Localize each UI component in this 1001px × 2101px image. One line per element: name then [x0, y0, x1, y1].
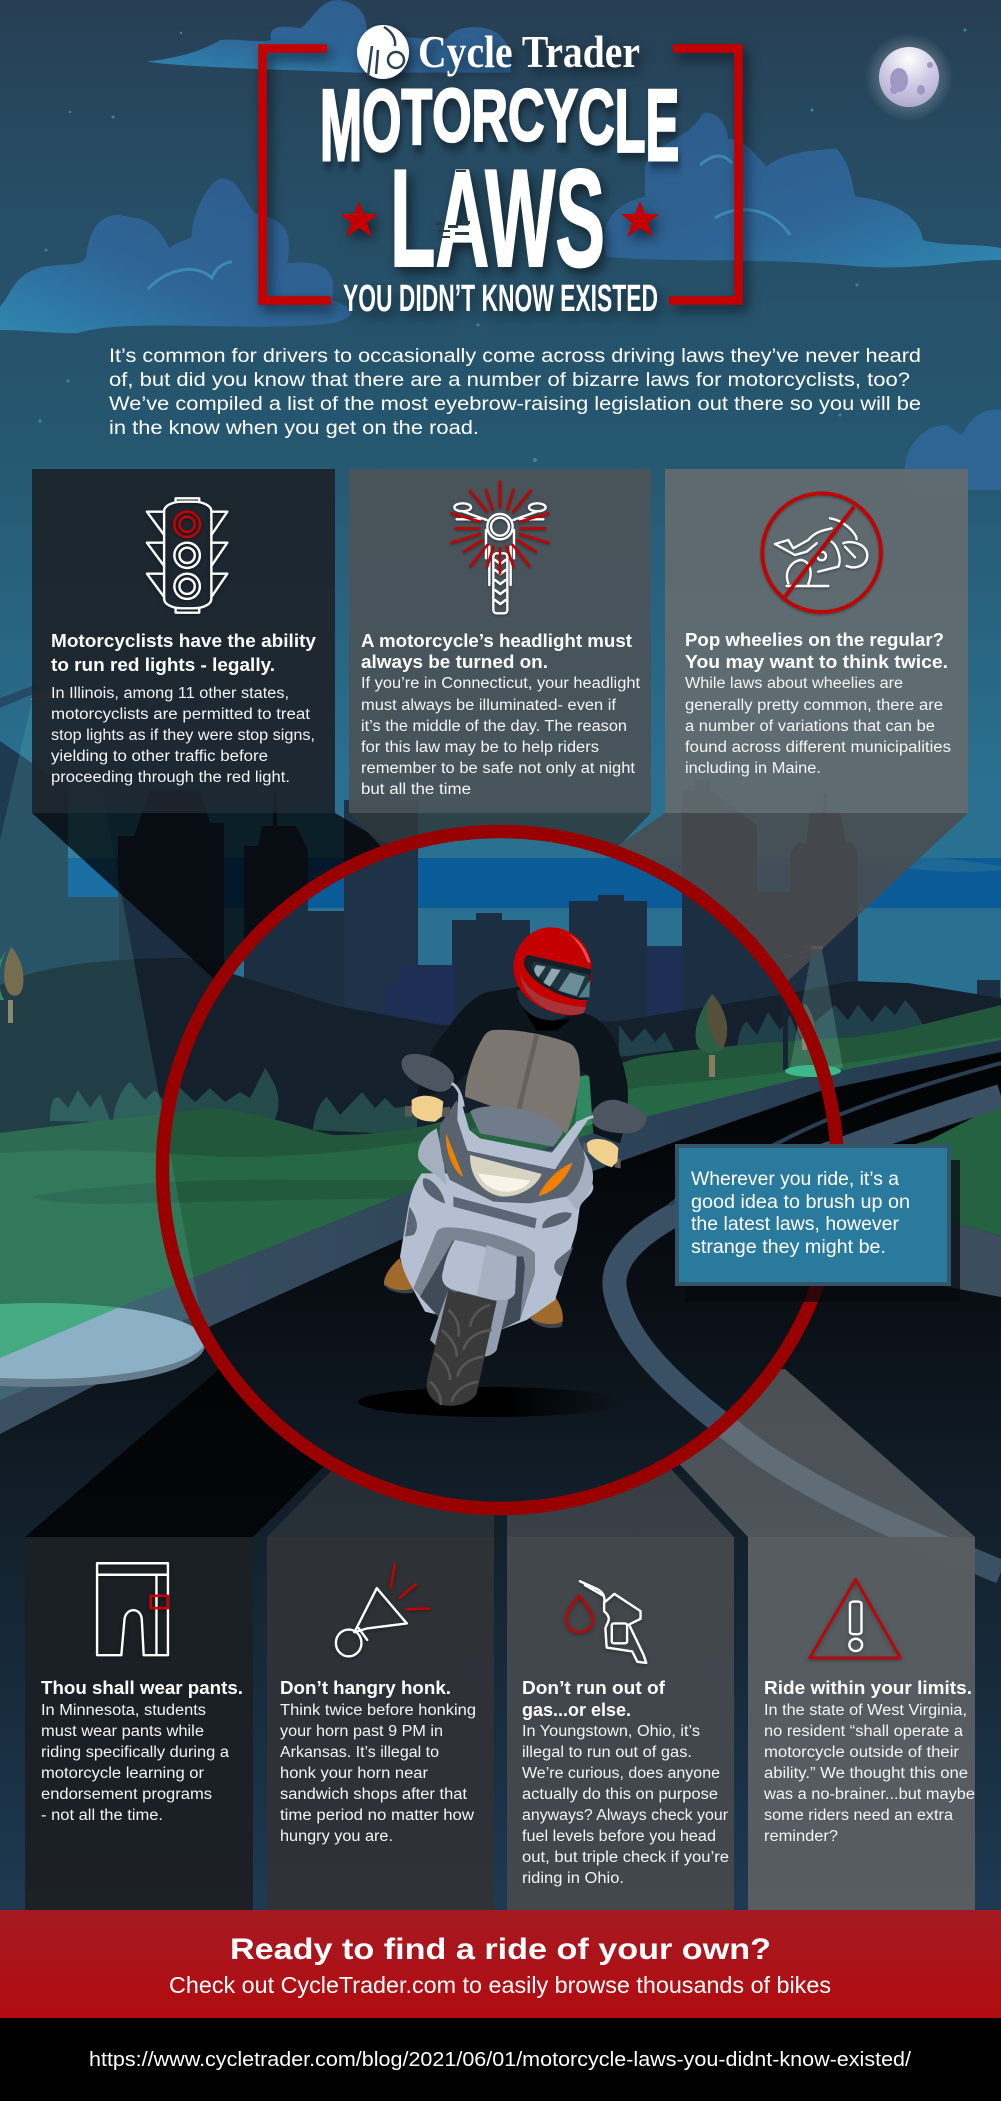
moon [865, 33, 953, 121]
turn signals [446, 1133, 463, 1177]
street lamp right [783, 946, 843, 1077]
vents and grille [423, 1178, 572, 1228]
body text: fuel levels before you head [522, 1828, 716, 1845]
body text: endorsement programs [41, 1786, 212, 1803]
cowl [440, 1100, 585, 1203]
cloud: left [0, 178, 351, 333]
MOTORCYCLE headline: C [508, 75, 544, 157]
body text: some riders need an extra [764, 1807, 953, 1824]
heading: gas...or else. [522, 1699, 631, 1720]
body text: ability.” We thought this one [764, 1765, 968, 1782]
body text: but all the time [361, 781, 471, 798]
body text: time period no matter how [280, 1807, 475, 1824]
callout box: the latest laws, however [691, 1213, 899, 1235]
call-to-action banner: Check out CycleTrader.com to easily browse thousands of bikes [169, 1972, 831, 1998]
panel: honk [267, 1537, 494, 1911]
body text: anyways? Always check your [522, 1807, 728, 1824]
heading [685, 629, 948, 672]
body text: remember to be safe not only at night [361, 760, 636, 777]
LAWS headline [390, 141, 605, 296]
MOTORCYCLE headline: O [362, 72, 401, 169]
icon: traffic light [147, 498, 227, 613]
Cycle Trader logo [357, 25, 640, 79]
body text: including in Maine. [685, 760, 821, 777]
panel: limits [748, 1537, 975, 1911]
source url footer [0, 2018, 1001, 2101]
icon: warning triangle [810, 1579, 900, 1658]
source url footer: https://www.cycletrader.com/blog/2021/06/01/motorcycle-laws-you-didnt-know-existed/ [89, 2049, 911, 2071]
field dark [0, 1005, 1001, 1360]
body text: was a no-brainer...but maybe [763, 1786, 975, 1803]
field light [0, 1037, 1001, 1360]
curved road lines [614, 1096, 1001, 1572]
trees [0, 947, 23, 1023]
side wings [418, 1128, 447, 1187]
LAWS headline: LAWS [390, 141, 605, 296]
heading: Motorcyclists have the ability [51, 630, 317, 651]
ground shadow [358, 1387, 624, 1417]
panel: wheelies [665, 469, 968, 813]
icon: motorcycle headlight [452, 482, 548, 613]
road base [0, 1052, 1001, 1600]
intro paragraph: It’s common for drivers to occasionally come across driving laws they’ve never heard [109, 346, 921, 367]
body text [685, 675, 951, 777]
body text: actually do this on purpose [522, 1786, 718, 1803]
city skyline [0, 685, 1001, 1100]
body text: a number of variations that can be [685, 718, 935, 735]
left lamp beam [0, 700, 200, 1400]
icon: gas nozzle [566, 1581, 646, 1663]
body text: motorcyclists are permitted to treat [51, 706, 311, 723]
callout box: good idea to brush up on [691, 1191, 910, 1213]
heading: to run red lights - legally. [51, 654, 275, 675]
motorcyclist illustration [384, 927, 647, 1406]
body text: In Illinois, among 11 other states, [51, 685, 289, 702]
light pool [0, 1303, 205, 1387]
body text: hungry you are. [280, 1828, 393, 1845]
intro paragraph: of, but did you know that there are a number of bizarre laws for motorcyclists, too? [109, 370, 910, 391]
heading: Don’t hangry honk. [280, 1677, 451, 1698]
MOTORCYCLE headline: E [645, 70, 679, 182]
body text: it’s the middle of the day. The reason [361, 718, 627, 735]
body text: - not all the time. [41, 1807, 163, 1824]
MOTORCYCLE headline: R [471, 75, 508, 157]
body text: must wear pants while [41, 1723, 204, 1740]
icon: pants [97, 1563, 168, 1655]
red spotlight ring [162, 832, 838, 1508]
bushes left [50, 1068, 417, 1135]
body text [41, 1702, 229, 1824]
icon: no wheelies [762, 493, 881, 612]
cloud: top centre [147, 0, 511, 73]
body text: While laws about wheelies are [685, 675, 903, 692]
body text [51, 685, 315, 786]
body text: In the state of West Virginia, [764, 1702, 967, 1719]
heading: Ride within your limits. [764, 1677, 972, 1698]
callout box [677, 1146, 960, 1302]
panel: red lights [32, 469, 335, 813]
fender arch [413, 1227, 535, 1330]
boots [384, 1258, 413, 1292]
red bracket frame [262, 48, 738, 300]
callout box: Wherever you ride, it’s a [691, 1168, 899, 1190]
upper panel funnels [25, 813, 975, 1537]
Cycle Trader logo: Cycle Trader [418, 27, 640, 77]
heading: always be turned on. [361, 651, 548, 672]
body text: If you’re in Connecticut, your headlight [361, 675, 641, 692]
body text: Think twice before honking [280, 1702, 476, 1719]
mirrors [402, 1054, 454, 1092]
body text: honk your horn near [280, 1765, 428, 1782]
lower panel funnels [25, 1370, 324, 1537]
star right [621, 201, 659, 237]
cloud: lower right [905, 410, 1001, 490]
panel: headlight [349, 469, 651, 813]
rider jacket [575, 1075, 595, 1128]
lamp post left [0, 685, 40, 708]
body text: stop lights as if they were stop signs, [51, 727, 315, 744]
front fender [442, 1240, 517, 1301]
heading: Thou shall wear pants. [41, 1677, 243, 1698]
heading [522, 1677, 666, 1720]
heading: A motorcycle’s headlight must [361, 630, 632, 651]
body text: out, but triple check if you’re [522, 1849, 729, 1866]
body text: must always be illuminated- even if [361, 697, 617, 714]
body text: Arkansas. It’s illegal to [280, 1744, 439, 1761]
body text: riding specifically during a [41, 1744, 229, 1761]
body text [763, 1702, 975, 1845]
body text: yielding to other traffic before [51, 748, 268, 765]
heading [361, 630, 632, 672]
helmet [513, 927, 591, 1015]
night sky background [0, 0, 1001, 1000]
forks [430, 1290, 457, 1350]
body text: found across different municipalities [685, 739, 951, 756]
road shoulder [0, 1040, 1001, 1434]
body text: In Minnesota, students [41, 1702, 206, 1719]
body text: generally pretty common, there are [685, 697, 943, 714]
body text: riding in Ohio. [522, 1870, 624, 1887]
MOTORCYCLE headline: M [320, 70, 362, 182]
heading: Don’t run out of [522, 1677, 666, 1698]
body text: In Youngstown, Ohio, it’s [522, 1723, 700, 1740]
body text: reminder? [764, 1828, 838, 1845]
intro paragraph: in the know when you get on the road. [109, 418, 479, 439]
intro paragraph [109, 346, 921, 439]
MOTORCYCLE headline: L [615, 72, 645, 171]
left ridge [0, 741, 119, 1100]
body text: sandwich shops after that [280, 1786, 468, 1803]
heading: You may want to think twice. [685, 651, 948, 672]
body text [522, 1723, 729, 1887]
body text: motorcycle learning or [41, 1765, 204, 1782]
intro paragraph: We’ve compiled a list of the most eyebrow-raising legislation out there so you will be [109, 394, 921, 415]
heading [51, 630, 317, 675]
body text: no resident “shall operate a [764, 1723, 963, 1740]
MOTORCYCLE headline: O [432, 75, 471, 158]
title block [262, 25, 738, 320]
panel: pants [25, 1537, 253, 1911]
tyre [427, 1290, 497, 1406]
body text: We’re curious, does anyone [522, 1765, 720, 1782]
body text [280, 1702, 476, 1845]
cloud: right [604, 113, 1001, 267]
body text: proceeding through the red light. [51, 769, 290, 786]
subtitle: YOU DIDN’T KNOW EXISTED [343, 278, 658, 320]
call-to-action banner [0, 1910, 1001, 2018]
right field [800, 1103, 1001, 1236]
hands [405, 1106, 621, 1168]
body text: illegal to run out of gas. [522, 1744, 692, 1761]
MOTORCYCLE headline: Y [544, 75, 578, 158]
callout box: strange they might be. [691, 1236, 886, 1258]
MOTORCYCLE headline: C [578, 74, 615, 160]
lower fairing [400, 1158, 593, 1330]
panel: gas [507, 1537, 734, 1911]
body text: for this law may be to help riders [361, 739, 599, 756]
hills and fields [0, 700, 1001, 1912]
MOTORCYCLE headline: T [401, 74, 432, 161]
headlight [470, 1155, 542, 1197]
heading: Pop wheelies on the regular? [685, 629, 944, 650]
body text: your horn past 9 PM in [280, 1723, 443, 1740]
windshield [465, 1030, 580, 1133]
star left [340, 201, 378, 237]
icon: horn [336, 1565, 429, 1656]
body text [361, 675, 641, 798]
body text: motorcycle outside of their [764, 1744, 959, 1761]
call-to-action banner: Ready to find a ride of your own? [230, 1933, 771, 1966]
MOTORCYCLE headline [320, 70, 682, 182]
